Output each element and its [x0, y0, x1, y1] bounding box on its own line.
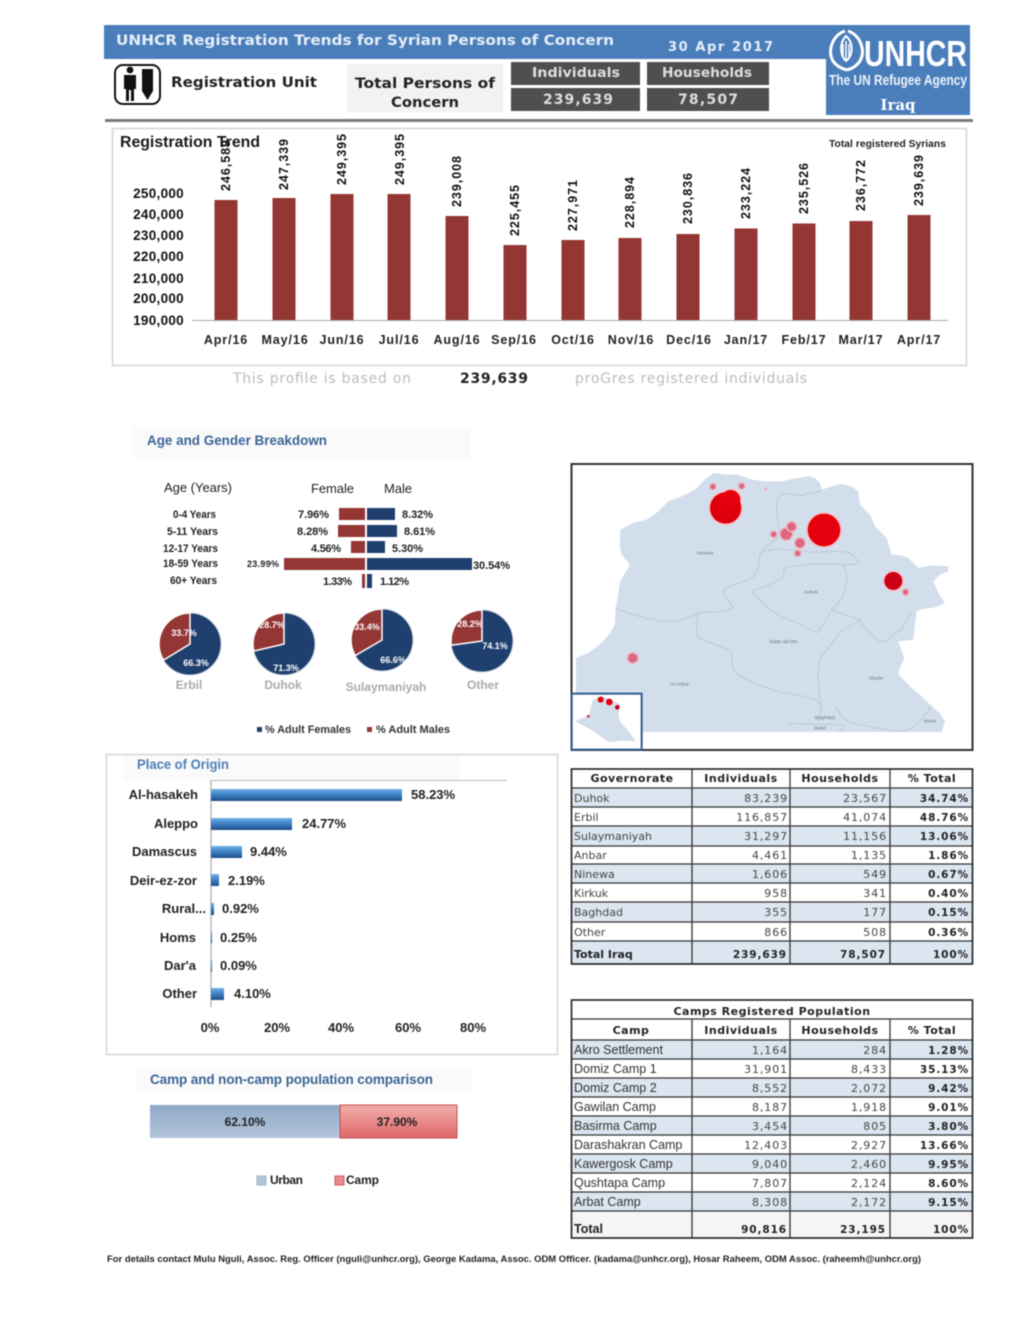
table: camps registered population: 9.95%: [928, 1159, 969, 1171]
table: governorate population: 355: [764, 906, 788, 919]
bar chart: origin governorates: 0.09%: [220, 958, 257, 973]
table: camps registered population: 2,072: [851, 1082, 887, 1095]
table: governorate population: Duhok: [574, 792, 610, 805]
comparison heading: Camp and non-camp population comparison: [150, 1072, 433, 1087]
table: governorate population: 1,135: [851, 849, 887, 862]
total persons of concern label: Total Persons of: [355, 76, 496, 92]
table: camps registered population: 12,403: [744, 1139, 788, 1152]
individuals total: [511, 62, 640, 111]
table: governorate population: Sulaymaniyah: [574, 830, 652, 843]
panel: age and gender breakdown: [133, 428, 513, 736]
table: camps registered population: 284: [863, 1044, 887, 1057]
table: camps registered population: Darashakran Camp: [574, 1138, 682, 1152]
table: governorate population: 48.76%: [920, 812, 969, 824]
header title bar: [104, 25, 838, 59]
pie: Erbil: [159, 613, 221, 692]
comparison legend: Camp: [346, 1173, 379, 1187]
households total: 78,507: [678, 92, 738, 108]
table: governorate population: % Total: [908, 772, 956, 785]
table: camps registered population: 2,927: [851, 1139, 887, 1152]
bar chart: registrations by month: 220,000: [133, 249, 184, 264]
pie: Erbil: 66.3%: [183, 658, 209, 668]
bar chart: origin governorates: Other: [162, 986, 197, 1001]
bar chart: registrations by month: 236,772: [854, 160, 868, 211]
table: camps registered population: Arbat Camp: [574, 1195, 641, 1209]
pie legend: [257, 724, 450, 736]
table: camps registered population: 23,195: [840, 1224, 886, 1236]
profile basis note: This profile is based on: [232, 371, 411, 387]
table: governorate population: 11,156: [843, 830, 887, 843]
icon: UNHCR emblem: [831, 31, 862, 70]
table: camps registered population: Akro Settlement: [574, 1043, 663, 1057]
footer contact note: For details contact Mulu Nguli, Assoc. Reg. Officer (nguli@unhcr.org), George Kadama, Assoc. ODM Officer. (kadama@unhcr.org), Hosar Raheem, ODM Assoc. (raheemh@unhcr.org): [107, 1254, 921, 1265]
table: governorate population: 508: [863, 926, 887, 939]
table: camps registered population: 2,172: [851, 1196, 887, 1209]
table: governorate population: 23,567: [843, 792, 887, 805]
pie: Other: [451, 610, 513, 692]
table: governorate population: Total Iraq: [574, 948, 633, 961]
table: camps registered population: 805: [863, 1120, 887, 1133]
panel: camp and non-camp comparison: [137, 1068, 473, 1187]
profile basis note: proGres registered individuals: [575, 371, 807, 387]
table: governorate population: 78,507: [840, 949, 886, 961]
total persons of concern label: [347, 64, 503, 112]
table: governorate population: 177: [863, 906, 887, 919]
icon: person and pencil: [115, 65, 160, 104]
pie: Duhok: 28.7%: [259, 620, 285, 630]
table: governorate population: Governorate: [590, 772, 674, 785]
table: governorate population: [572, 769, 972, 964]
panel: registration trend: [112, 128, 966, 366]
individuals total: Individuals: [532, 66, 620, 81]
pie: Duhok: 71.3%: [273, 663, 299, 673]
table: governorate population: 13.06%: [920, 831, 969, 843]
table: camps registered population: 8,187: [752, 1101, 788, 1114]
households total: [647, 62, 769, 111]
pie: Erbil: 33.7%: [171, 628, 197, 638]
bar chart: registrations by month: 250,000: [133, 186, 184, 201]
registration unit: [115, 65, 317, 104]
bar chart: registrations by month: Nov/16: [608, 333, 654, 347]
map of northern Iraq: Wasit: [924, 718, 937, 724]
bar chart: registrations by month: 200,000: [133, 291, 184, 306]
bar chart: registrations by month: May/16: [261, 333, 309, 347]
bar chart: origin governorates: 80%: [460, 1020, 486, 1035]
bar chart: origin governorates: 24.77%: [302, 816, 347, 831]
table: camps registered population: Kawergosk Camp: [574, 1157, 673, 1171]
table: camps registered population: Domiz Camp 1: [574, 1062, 657, 1076]
bar chart: registrations by month: 225,455: [508, 185, 522, 236]
age pyramid chart: 8.28%: [297, 526, 328, 538]
bar chart: registrations by month: 239,639: [912, 155, 926, 206]
table: governorate population: 41,074: [843, 811, 887, 824]
age pyramid chart: Female: [311, 481, 354, 496]
table: governorate population: 4,461: [752, 849, 788, 862]
table: governorate population: Households: [801, 772, 879, 785]
pie: Duhok: [253, 613, 315, 692]
bar chart: registrations by month: 190,000: [133, 313, 184, 328]
table: governorate population: 0.15%: [928, 907, 969, 919]
table: governorate population: Kirkuk: [574, 887, 609, 900]
age pyramid chart: 5-11 Years: [167, 526, 218, 538]
bar chart: origin governorates: Rural...: [162, 901, 206, 916]
logo wordmark: UNHCR: [864, 33, 967, 74]
bar chart: registrations by month: Aug/16: [433, 333, 481, 347]
table: camps registered population: 7,807: [752, 1177, 788, 1190]
table: governorate population: Other: [574, 926, 606, 939]
bar chart: origin governorates: [129, 780, 507, 1035]
table: camps registered population: 2,460: [851, 1158, 887, 1171]
bar chart: registrations by month: Apr/17: [897, 333, 941, 347]
age pyramid chart: 4.56%: [311, 543, 341, 555]
table: governorate population: 31,297: [744, 830, 788, 843]
map inset: Iraq overview: [572, 694, 642, 750]
comparison legend: [257, 1173, 379, 1187]
table: camps registered population: 8,308: [752, 1196, 788, 1209]
table: governorate population: 549: [863, 868, 887, 881]
age pyramid chart: 8.61%: [404, 526, 435, 538]
place of origin heading: Place of Origin: [137, 757, 229, 772]
map of northern Iraq: [576, 473, 948, 732]
age pyramid chart: 1.33%: [323, 576, 352, 588]
bar chart: origin governorates: Al-hasakeh: [129, 787, 198, 802]
pie: Sulaymaniyah: Sulaymaniyah: [346, 680, 426, 694]
map of northern Iraq: Baghdad: [815, 715, 835, 721]
pie: Sulaymaniyah: 33.4%: [354, 622, 380, 632]
table: governorate population: Individuals: [704, 772, 778, 785]
bar chart: registrations by month: 240,000: [133, 207, 184, 222]
age pyramid chart: 12-17 Years: [163, 543, 218, 555]
table: camps registered population: Camp: [613, 1024, 649, 1037]
table: camps registered population: 3,454: [752, 1120, 788, 1133]
table: camps registered population: Basirma Camp: [574, 1119, 657, 1133]
bar chart: origin governorates: Homs: [160, 930, 196, 945]
table: camps registered population: 90,816: [741, 1224, 787, 1236]
table: camps registered population: 8,552: [752, 1082, 788, 1095]
age pyramid chart: 18-59 Years: [163, 558, 218, 570]
bar chart: origin governorates: Aleppo: [154, 816, 198, 831]
table: camps registered population: 9.15%: [928, 1197, 969, 1209]
table: governorate population: 1.86%: [928, 850, 969, 862]
pie: Other: Other: [467, 678, 499, 692]
age pyramid chart: Age (Years): [164, 480, 232, 495]
bar chart: origin governorates: 40%: [328, 1020, 354, 1035]
panel: place of origin: [106, 754, 558, 1054]
bar chart: origin governorates: 20%: [264, 1020, 290, 1035]
bar chart: origin governorates: 60%: [395, 1020, 421, 1035]
table: governorate population: 0.67%: [928, 869, 969, 881]
bar chart: registrations by month: Feb/17: [782, 333, 826, 347]
table: camps registered population: 13.66%: [920, 1140, 969, 1152]
stacked bar: urban and camp share: [150, 1105, 457, 1138]
bar chart: origin governorates: 2.19%: [228, 873, 265, 888]
table: camps registered population: Individuals: [704, 1024, 778, 1037]
profile basis note: [232, 371, 807, 387]
bar chart: registrations by month: Oct/16: [551, 333, 595, 347]
table: governorate population: 239,639: [733, 949, 787, 961]
table: governorate population: 100%: [933, 949, 969, 961]
table: governorate population: 341: [863, 887, 887, 900]
table: governorate population: 958: [764, 887, 788, 900]
pie legend: % Adult Males: [376, 724, 450, 736]
table: camps registered population: Domiz Camp 2: [574, 1081, 657, 1095]
table: governorate population: 83,239: [744, 792, 788, 805]
age pyramid chart: 60+ Years: [170, 575, 217, 587]
bar chart: registrations by month: Mar/17: [838, 333, 884, 347]
age pyramid chart: 30.54%: [473, 560, 510, 572]
registration unit label: Registration Unit: [171, 75, 317, 91]
country name: Iraq: [880, 96, 916, 114]
households total: Households: [662, 66, 752, 81]
table: camps registered population: 9.42%: [928, 1083, 969, 1095]
table: camps registered population: 100%: [933, 1224, 969, 1236]
age pyramid chart: 0-4 Years: [173, 509, 216, 521]
table: governorate population: Ninewa: [574, 868, 615, 881]
bar chart: registrations by month: 235,526: [797, 163, 811, 214]
table: governorate population: Anbar: [574, 849, 607, 862]
bar chart: origin governorates: 0.25%: [220, 930, 257, 945]
logo tagline: The UN Refugee Agency: [829, 72, 968, 89]
table: governorate population: 866: [764, 926, 788, 939]
panel: map of registered population: [572, 464, 972, 750]
table: camps registered population: [572, 1000, 972, 1238]
report date: 30 Apr 2017: [668, 40, 773, 55]
bar chart: registrations by month: 249,395: [393, 134, 407, 185]
map of northern Iraq: Diyala: [869, 676, 883, 682]
bar chart: registrations by month: 230,000: [133, 228, 184, 243]
table: camps registered population: 9.01%: [928, 1102, 969, 1114]
stacked bar: urban and camp share: 37.90%: [377, 1115, 418, 1129]
bar chart: registrations by month: 246,589: [219, 140, 233, 191]
table: camps registered population: 1,918: [851, 1101, 887, 1114]
age and gender heading: Age and Gender Breakdown: [147, 433, 327, 448]
table: camps registered population: 2,124: [851, 1177, 887, 1190]
table: camps registered population: Camps Registered Population: [673, 1005, 871, 1018]
table: camps registered population: Households: [801, 1024, 879, 1037]
table: camps registered population: 8,433: [851, 1063, 887, 1076]
pie: Sulaymaniyah: 66.6%: [380, 655, 406, 665]
bar chart: registrations by month: Dec/16: [666, 333, 712, 347]
table: camps registered population: 9,040: [752, 1158, 788, 1171]
age pyramid chart: [163, 480, 510, 588]
bar chart: registrations by month: 249,395: [335, 134, 349, 185]
bar chart: origin governorates: 4.10%: [234, 986, 271, 1001]
table: governorate population: 116,857: [736, 811, 788, 824]
table: camps registered population: % Total: [908, 1024, 956, 1037]
table: governorate population: 34.74%: [920, 793, 969, 805]
pie: Other: 74.1%: [482, 641, 508, 651]
map of northern Iraq: Al-Anbar: [670, 682, 689, 688]
bar chart: registrations by month: 247,339: [277, 139, 291, 190]
individuals total: 239,639: [543, 92, 613, 108]
UNHCR logo box: [826, 25, 970, 115]
age pyramid chart: Male: [384, 481, 412, 496]
table: camps registered population: 1,164: [752, 1044, 788, 1057]
title: UNHCR Registration Trends for Syrian Persons of Concern: [116, 33, 614, 49]
bar chart: registrations by month: 227,971: [566, 180, 580, 231]
bar chart: registrations by month: Jun/16: [320, 333, 364, 347]
bar chart: registrations by month: 239,008: [450, 156, 464, 207]
bar chart: origin governorates: Damascus: [132, 844, 197, 859]
table: camps registered population: 3.80%: [928, 1121, 969, 1133]
map of northern Iraq: Salah ad-Din: [769, 639, 798, 645]
bar chart: registrations by month: Sep/16: [491, 333, 537, 347]
pie: Erbil: Erbil: [176, 678, 202, 692]
bar chart: origin governorates: 58.23%: [411, 787, 456, 802]
age pyramid chart: 8.32%: [402, 509, 433, 521]
pie: Other: 28.2%: [457, 619, 483, 629]
table: camps registered population: 8.60%: [928, 1178, 969, 1190]
table: camps registered population: 1.28%: [928, 1045, 969, 1057]
bar chart: origin governorates: 0.92%: [222, 901, 259, 916]
bar chart: origin governorates: Deir-ez-zor: [130, 873, 197, 888]
pie legend: % Adult Females: [265, 724, 351, 736]
pie: Sulaymaniyah: [346, 609, 426, 694]
bar chart: origin governorates: 9.44%: [250, 844, 287, 859]
table: governorate population: 0.40%: [928, 888, 969, 900]
table: camps registered population: 35.13%: [920, 1064, 969, 1076]
bar chart: registrations by month: 210,000: [133, 271, 184, 286]
stacked bar: urban and camp share: 62.10%: [225, 1115, 266, 1129]
registration trend heading: Registration Trend: [120, 134, 260, 151]
bar chart: registrations by month: Jan/17: [724, 333, 768, 347]
table: governorate population: 1,606: [752, 868, 788, 881]
chart subtitle: Total registered Syrians: [829, 138, 946, 150]
table: governorate population: Baghdad: [574, 906, 623, 919]
table: camps registered population: Qushtapa Camp: [574, 1176, 665, 1190]
bar chart: origin governorates: Dar'a: [164, 958, 197, 973]
table: camps registered population: Total: [574, 1222, 603, 1236]
table: governorate population: Erbil: [574, 811, 599, 824]
age pyramid chart: 23.99%: [247, 559, 279, 569]
comparison legend: Urban: [270, 1173, 303, 1187]
map of northern Iraq: Babil: [814, 726, 826, 732]
map of northern Iraq: Kirkuk: [804, 590, 818, 596]
map of northern Iraq: Ninewa: [697, 551, 714, 557]
table: governorate population: 0.36%: [928, 927, 969, 939]
profile basis note: 239,639: [460, 371, 528, 387]
bar chart: registrations by month: 233,224: [739, 168, 753, 219]
bar chart: registrations by month: 230,836: [681, 173, 695, 224]
table: camps registered population: Gawilan Camp: [574, 1100, 656, 1114]
age pyramid chart: 7.96%: [298, 509, 329, 521]
table: camps registered population: 31,901: [744, 1063, 788, 1076]
pie: Duhok: Duhok: [264, 678, 302, 692]
total persons of concern label: Concern: [391, 95, 459, 111]
bar chart: origin governorates: 0%: [201, 1020, 220, 1035]
bar chart: registrations by month: 228,894: [623, 177, 637, 228]
age pyramid chart: 5.30%: [392, 543, 423, 555]
bar chart: registrations by month: Apr/16: [204, 333, 248, 347]
bar chart: registrations by month: Jul/16: [379, 333, 419, 347]
age pyramid chart: 1.12%: [380, 576, 409, 588]
bar chart: registrations by month: [133, 134, 948, 347]
